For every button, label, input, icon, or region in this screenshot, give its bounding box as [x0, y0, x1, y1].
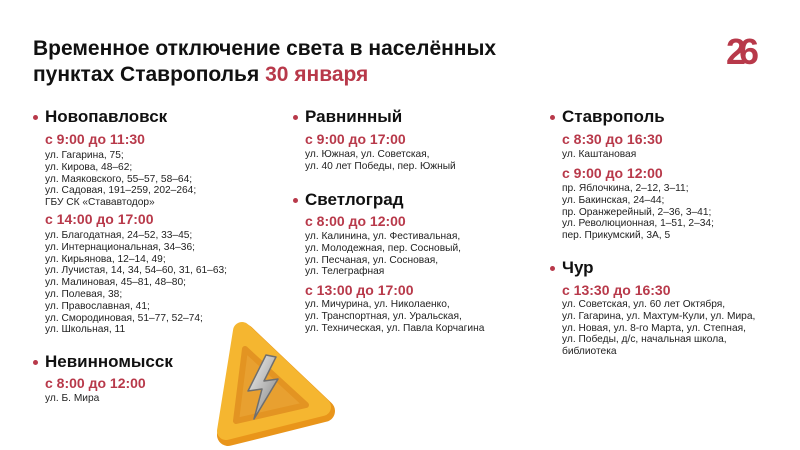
addresses: ул. Гагарина, 75;	[45, 150, 124, 161]
addresses: ул. Советская, ул. 60 лет Октября,	[562, 299, 725, 310]
addresses: библиотека	[562, 346, 617, 357]
time: с 9:00 до 11:30	[45, 131, 145, 147]
addresses	[45, 150, 196, 208]
time: с 14:00 до 17:00	[45, 211, 154, 227]
title: Временное отключение света в населённых	[33, 37, 496, 60]
addresses: пр. Оранжерейный, 2–36, 3–41;	[562, 207, 711, 218]
time: с 8:00 до 12:00	[45, 375, 146, 391]
addresses: ул. Кирьянова, 12–14, 49;	[45, 254, 166, 265]
addresses: ул. Б. Мира	[45, 393, 99, 404]
column 2	[293, 107, 484, 334]
addresses: ул. Садовая, 191–259, 202–264;	[45, 185, 196, 196]
time: с 8:00 до 12:00	[305, 213, 406, 229]
addresses: ул. Гагарина, ул. Махтум-Кули, ул. Мира,	[562, 311, 755, 322]
addresses: ул. Калинина, ул. Фестивальная,	[305, 231, 460, 242]
addresses: ул. Революционная, 1–51, 2–34;	[562, 218, 714, 229]
addresses	[305, 231, 461, 277]
addresses: ул. Малиновая, 45–81, 48–80;	[45, 277, 186, 288]
addresses: ул. Телеграфная	[305, 266, 384, 277]
addresses: ул. 40 лет Победы, пер. Южный	[305, 161, 456, 172]
city: Невинномысск: Невинномысск	[45, 352, 173, 371]
city: Равнинный: Равнинный	[305, 107, 402, 126]
addresses: ул. Кирова, 48–62;	[45, 162, 132, 173]
column 1	[33, 107, 227, 404]
addresses: ул. Новая, ул. 8-го Марта, ул. Степная,	[562, 323, 746, 334]
time: с 9:00 до 12:00	[562, 165, 663, 181]
addresses: ул. Школьная, 11	[45, 324, 125, 335]
addresses: ул. Техническая, ул. Павла Корчагина	[305, 323, 484, 334]
addresses	[45, 230, 227, 335]
addresses: ул. Южная, ул. Советская,	[305, 149, 430, 160]
addresses	[305, 299, 484, 334]
addresses: ул. Мичурина, ул. Николаенко,	[305, 299, 450, 310]
addresses: ул. Благодатная, 24–52, 33–45;	[45, 230, 192, 241]
addresses: ул. Лучистая, 14, 34, 54–60, 31, 61–63;	[45, 265, 227, 276]
addresses: ул. Каштановая	[562, 149, 636, 160]
addresses: ул. Транспортная, ул. Уральская,	[305, 311, 462, 322]
addresses: пр. Яблочкина, 2–12, 3–11;	[562, 183, 689, 194]
addresses: ул. Маяковского, 55–57, 58–64;	[45, 174, 192, 185]
addresses	[305, 149, 456, 172]
city: Чур: Чур	[562, 258, 594, 277]
time: с 9:00 до 17:00	[305, 131, 406, 147]
addresses: ул. Полевая, 38;	[45, 289, 122, 300]
addresses: ул. Молодежная, пер. Сосновый,	[305, 243, 461, 254]
addresses: ул. Бакинская, 24–44;	[562, 195, 664, 206]
title: пунктах Ставрополья 30 января	[33, 63, 368, 86]
addresses: пер. Прикумский, 3А, 5	[562, 230, 670, 241]
city: Ставрополь: Ставрополь	[562, 107, 665, 126]
addresses: ул. Песчаная, ул. Сосновая,	[305, 255, 438, 266]
addresses: ул. Победы, д/с, начальная школа,	[562, 334, 727, 345]
column 3	[550, 107, 755, 357]
time: с 13:00 до 17:00	[305, 282, 414, 298]
time: с 8:30 до 16:30	[562, 131, 663, 147]
time: с 13:30 до 16:30	[562, 282, 671, 298]
title	[33, 37, 496, 86]
addresses: ул. Православная, 41;	[45, 301, 150, 312]
icon: warning triangle with lightning	[217, 322, 335, 446]
city: Светлоград: Светлоград	[305, 190, 404, 209]
addresses	[562, 299, 755, 357]
addresses: ул. Смородиновая, 51–77, 52–74;	[45, 313, 203, 324]
city: Новопавловск: Новопавловск	[45, 107, 167, 126]
addresses: ул. Интернациональная, 34–36;	[45, 242, 195, 253]
addresses	[562, 183, 714, 241]
addresses: ГБУ СК «Стававтодор»	[45, 197, 155, 208]
